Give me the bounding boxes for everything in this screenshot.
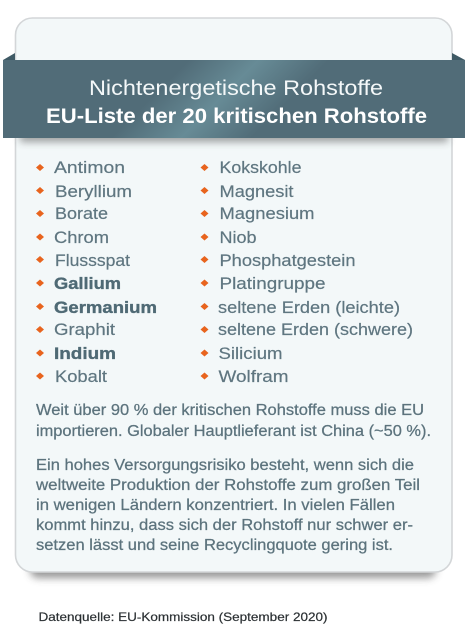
list: column 2: Magnesium bbox=[220, 204, 314, 223]
list: column 1: Germanium bbox=[54, 298, 157, 317]
paragraph: imports bbox=[36, 402, 431, 440]
list: column 1: Beryllium bbox=[55, 182, 132, 201]
list: column 2 bbox=[200, 158, 413, 386]
paragraph: supply risk bbox=[35, 457, 420, 554]
list: column 1: Borate bbox=[55, 204, 108, 223]
list: column 2: Phosphatgestein bbox=[220, 251, 356, 270]
list: column 1 bbox=[36, 158, 157, 386]
list: column 1: Chrom bbox=[54, 228, 109, 247]
list: column 2: Wolfram bbox=[218, 367, 288, 386]
paragraph: imports: importieren. Globaler Hauptlieferant ist China (~50 %). bbox=[36, 423, 431, 440]
list: column 1: Kobalt bbox=[55, 367, 107, 386]
list: column 1: Flussspat bbox=[55, 251, 130, 270]
list: column 2: Kokskohle bbox=[220, 158, 302, 177]
paragraph: supply risk: weltweite Produktion der Rohstoffe zum großen Teil bbox=[35, 477, 420, 494]
list: column 2: Platingruppe bbox=[220, 274, 326, 293]
banner folds bbox=[3, 53, 465, 60]
paragraph: supply risk: setzen lässt und seine Recyclingquote gering ist. bbox=[36, 537, 393, 554]
list: column 1: Indium bbox=[54, 344, 116, 363]
paragraph: imports: Weit über 90 % der kritischen Rohstoffe muss die EU bbox=[36, 402, 424, 419]
list: column 2: Silicium bbox=[218, 344, 282, 363]
paragraph: supply risk: Ein hohes Versorgungsrisiko besteht, wenn sich die bbox=[36, 457, 414, 474]
list: column 2: seltene Erden (schwere) bbox=[218, 320, 413, 339]
list: column 2: Niob bbox=[220, 228, 256, 247]
banner shadow bbox=[20, 131, 448, 142]
list: column 1: Antimon bbox=[54, 158, 125, 177]
list: column 1: Gallium bbox=[54, 274, 121, 293]
list: column 1: Graphit bbox=[54, 320, 115, 339]
list: column 2: Magnesit bbox=[220, 182, 294, 201]
card shadow bbox=[30, 558, 436, 578]
title line 2: EU-Liste der 20 kritischen Rohstoffe bbox=[46, 105, 427, 128]
title line 1: Nichtenergetische Rohstoffe bbox=[89, 77, 383, 100]
source note: Datenquelle: EU-Kommission (September 2020) bbox=[38, 610, 328, 624]
list: column 2: seltene Erden (leichte) bbox=[218, 298, 400, 317]
paragraph: supply risk: in wenigen Ländern konzentriert. In vielen Fällen bbox=[36, 497, 395, 514]
banner bbox=[3, 53, 465, 142]
paragraph: supply risk: kommt hinzu, dass sich der Rohstoff nur schwer er- bbox=[36, 517, 413, 534]
